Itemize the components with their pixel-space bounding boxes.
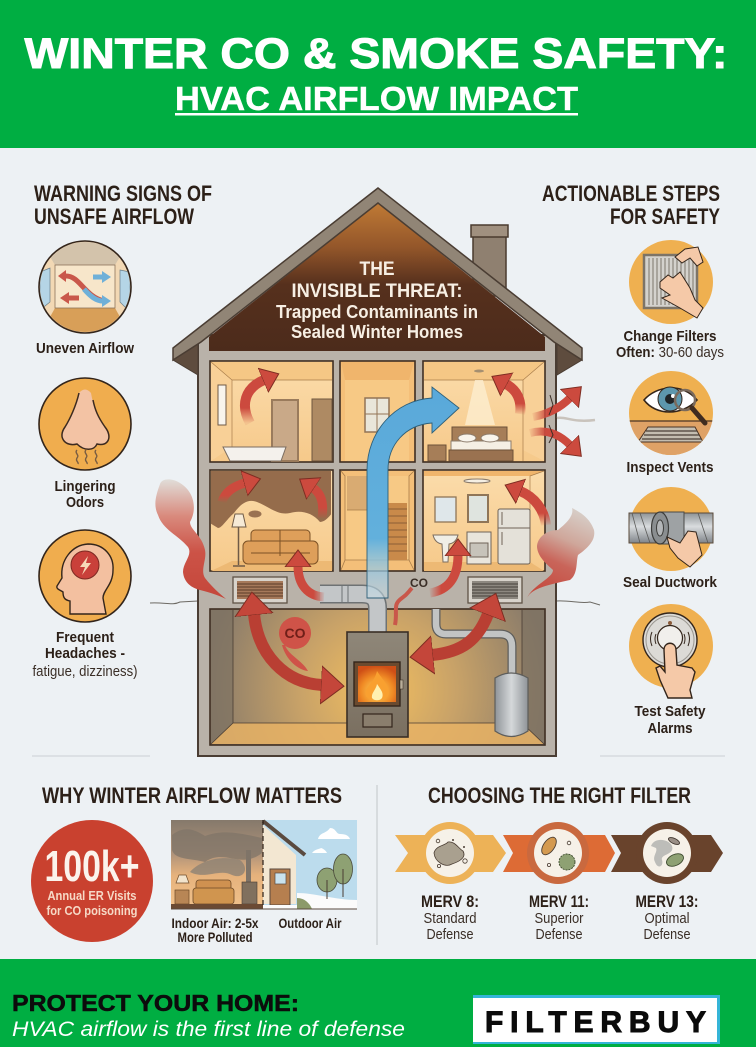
label: test safety alarms: Alarms bbox=[648, 720, 692, 737]
caption: indoor air bbox=[172, 915, 259, 945]
label: lingering odors: Lingering bbox=[54, 478, 116, 495]
label: MERV 8 bbox=[421, 892, 479, 943]
furnace bbox=[347, 632, 408, 737]
footer banner bbox=[0, 959, 756, 1047]
heading: warning signs: WARNING SIGNS OF bbox=[34, 181, 212, 206]
heading: warning signs: UNSAFE AIRFLOW bbox=[34, 204, 194, 229]
label: lingering odors: Odors bbox=[66, 494, 104, 511]
heading: why winter airflow matters: WHY WINTER AIRFLOW MATTERS bbox=[42, 783, 342, 808]
label: frequent headaches: fatigue, dizziness) bbox=[32, 663, 138, 680]
label: frequent headaches: Headaches - bbox=[45, 645, 125, 662]
label: lingering odors bbox=[54, 478, 116, 511]
chimney bbox=[471, 225, 508, 296]
callout: CO in basement: CO bbox=[284, 625, 306, 641]
vent: left bbox=[233, 577, 287, 603]
heading: warning signs bbox=[34, 181, 212, 229]
panel: choosing the right filter bbox=[395, 783, 723, 943]
illustration: indoor vs outdoor air bbox=[171, 820, 357, 909]
callout: CO near duct bbox=[395, 576, 428, 625]
chart: house cutaway diagram bbox=[32, 188, 725, 756]
water heater bbox=[436, 609, 528, 736]
callout: CO near duct: CO bbox=[410, 576, 428, 590]
label: MERV 13 bbox=[636, 892, 698, 943]
label: MERV 8: MERV 8: bbox=[421, 892, 479, 911]
arrow: red duct to living room bbox=[298, 566, 324, 597]
room: bedroom bbox=[423, 361, 545, 462]
stat badge: 100k+ bbox=[31, 820, 153, 942]
icon: seal ductwork bbox=[629, 487, 713, 571]
label: MERV 8: Standard bbox=[424, 910, 476, 927]
callout: CO in basement bbox=[279, 617, 311, 671]
label: inspect vents: Inspect Vents bbox=[626, 459, 714, 476]
logo: Filterbuy: FILTERBUY bbox=[485, 1006, 706, 1039]
label: test safety alarms: Test Safety bbox=[634, 703, 706, 720]
attic heading: the invisible threat: Sealed Winter Homes bbox=[291, 322, 463, 342]
icon: test safety alarm bbox=[629, 604, 713, 698]
attic heading: the invisible threat: THE bbox=[360, 259, 394, 280]
attic heading: the invisible threat: Trapped Contaminants in bbox=[276, 302, 478, 322]
panel: warning signs of unsafe airflow bbox=[32, 181, 212, 680]
label: frequent headaches bbox=[32, 629, 138, 680]
arrow: blue supply air bbox=[367, 387, 459, 598]
chevron: MERV 8 bbox=[395, 822, 506, 884]
attic heading: the invisible threat bbox=[276, 259, 478, 342]
heading: choosing the right filter: CHOOSING THE RIGHT FILTER bbox=[428, 783, 691, 808]
attic heading: the invisible threat: INVISIBLE THREAT: bbox=[292, 281, 462, 302]
stat badge: 100k+: for CO poisoning bbox=[46, 904, 138, 918]
heading: actionable steps bbox=[542, 181, 720, 229]
label: MERV 11: Superior bbox=[534, 910, 584, 927]
footer heading: PROTECT YOUR HOME: bbox=[12, 990, 299, 1016]
label: change filters bbox=[616, 328, 724, 361]
room: bathroom bbox=[210, 361, 333, 462]
label: MERV 13: Defense bbox=[644, 926, 690, 943]
chevron: MERV 13 bbox=[611, 822, 723, 884]
logo: Filterbuy bbox=[473, 995, 720, 1044]
icon: nose bbox=[39, 378, 131, 470]
arrows: leaks through right wall bbox=[530, 395, 595, 445]
arrow: red two-way right bbox=[432, 614, 488, 655]
roof bbox=[173, 188, 582, 375]
caption: indoor air: More Polluted bbox=[178, 929, 252, 945]
basement bbox=[210, 609, 545, 745]
room: stair hall bbox=[340, 470, 415, 571]
label: MERV 11: MERV 11: bbox=[529, 892, 589, 911]
icon: change filter bbox=[629, 240, 713, 324]
flue duct elbow bbox=[320, 586, 378, 634]
label: MERV 13: MERV 13: bbox=[636, 892, 698, 911]
label: MERV 11: Defense bbox=[536, 926, 582, 943]
divider between bottom panels bbox=[376, 785, 378, 945]
room: living room with smoke bbox=[205, 465, 335, 571]
icon: uneven airflow room bbox=[39, 240, 131, 335]
label: change filters: Often: 30-60 days bbox=[616, 344, 724, 361]
arrow: red duct to kitchen bbox=[430, 555, 458, 593]
chevron: MERV 11 bbox=[503, 822, 615, 884]
heading: actionable steps: FOR SAFETY bbox=[610, 204, 720, 229]
footer tagline: HVAC airflow is the first line of defense bbox=[12, 1018, 405, 1041]
label: change filters: Change Filters bbox=[624, 328, 716, 345]
vent: right bbox=[468, 577, 522, 603]
icon: inspect vents bbox=[628, 371, 714, 457]
label: test safety alarms bbox=[634, 703, 706, 737]
house walls bbox=[198, 335, 556, 756]
label: MERV 11 bbox=[529, 892, 589, 943]
smoke plume: left bbox=[155, 479, 226, 599]
stat badge: 100k+: 100k+ bbox=[44, 842, 140, 891]
label: uneven airflow: Uneven Airflow bbox=[36, 340, 134, 357]
header banner bbox=[0, 0, 756, 148]
panel: why winter airflow matters bbox=[31, 783, 357, 945]
label: MERV 8: Defense bbox=[426, 926, 474, 943]
label: frequent headaches: Frequent bbox=[56, 629, 114, 646]
subtitle: HVAC AIRFLOW IMPACT bbox=[175, 80, 578, 117]
label: MERV 13: Optimal bbox=[644, 910, 690, 927]
ground lines bbox=[150, 601, 600, 605]
title: WINTER CO & SMOKE SAFETY: bbox=[24, 30, 728, 78]
icon: head with headache bbox=[39, 530, 131, 622]
stat badge: 100k+: Annual ER Visits bbox=[48, 889, 137, 903]
smoke plume: right bbox=[527, 508, 594, 598]
room: kitchen bbox=[423, 470, 546, 571]
caption: outdoor air: Outdoor Air bbox=[278, 915, 342, 931]
arrow: red two-way left bbox=[254, 614, 322, 685]
caption: indoor air: Indoor Air: 2-5x bbox=[172, 915, 259, 931]
room: upper hall bbox=[340, 361, 415, 462]
label: seal ductwork: Seal Ductwork bbox=[623, 574, 718, 591]
panel: actionable steps for safety bbox=[542, 181, 724, 737]
